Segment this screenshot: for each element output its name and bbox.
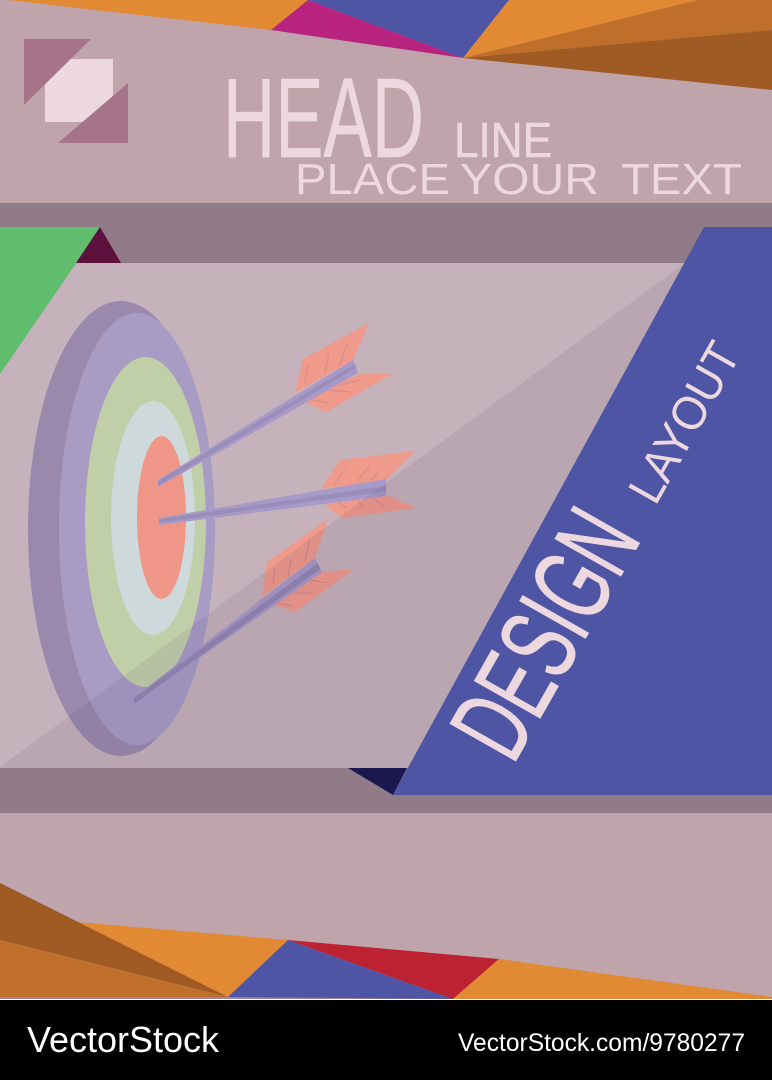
panel title: layout: LAYOUT: [619, 334, 751, 512]
panel title: design: DESIGN: [427, 489, 663, 778]
target board: [28, 301, 215, 756]
lower grey band: [0, 768, 772, 813]
upper grey band: [0, 203, 772, 263]
green corner shape: [0, 227, 101, 374]
bottom colour shards: [0, 883, 772, 999]
logo icon: [24, 39, 128, 143]
footer url: VectorStock.com/9780277: [458, 1029, 745, 1057]
arrow: middle: [159, 451, 416, 525]
headline: HEAD: [223, 55, 424, 181]
navy triangle: [348, 768, 407, 795]
headline: LINE: [454, 114, 552, 168]
dark purple triangle: [76, 227, 121, 263]
arrow: bottom: [134, 519, 355, 704]
top colour shards: [8, 0, 772, 90]
arrow: top: [158, 323, 392, 487]
subheading: YOUR: [460, 156, 599, 204]
subheading: PLACE: [295, 156, 450, 204]
blue side panel: [393, 227, 772, 795]
lilac bottom edge: [0, 997, 772, 999]
diagonal shade: [0, 263, 710, 768]
subheading: [295, 156, 742, 204]
central panel: [0, 263, 772, 768]
footer bar: [0, 1000, 772, 1080]
white rule: [0, 999, 772, 1000]
subheading: TEXT: [621, 156, 742, 204]
footer brand: VectorStock: [27, 1019, 220, 1060]
